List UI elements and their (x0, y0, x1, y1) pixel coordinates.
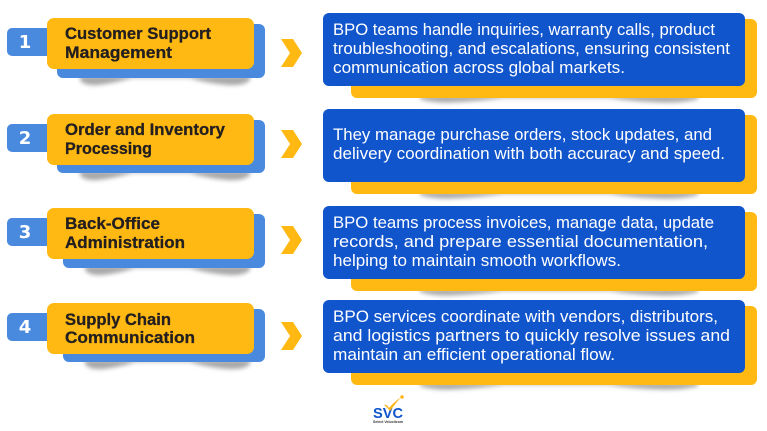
description 1 (323, 13, 745, 86)
shadow: right card 1 (420, 96, 698, 103)
shadow: left card 2 (80, 171, 250, 180)
shadow: left card 3 (85, 266, 250, 275)
heading 4 (47, 303, 254, 354)
number tab 1: 1 (19, 32, 31, 53)
shadow: right card 2 (420, 192, 698, 199)
back plate right 2 (351, 115, 757, 194)
description 2: delivery coordination with both accuracy and speed. (333, 145, 725, 163)
logo (373, 395, 404, 424)
description 3: records, and prepare essential documentation, (333, 233, 708, 251)
number tab 4: 4 (19, 317, 31, 338)
back plate right 4 (351, 306, 757, 385)
shadow: left card 1 (80, 76, 250, 85)
shadow: right card 3 (420, 289, 698, 296)
heading 3: Back-Office (65, 214, 160, 233)
arrow 2 (281, 130, 302, 158)
description 4: and logistics partners to quickly resolve issues and (333, 327, 730, 345)
number tab 4 (7, 313, 57, 341)
heading 1: Customer Support (65, 24, 211, 43)
number tab 3 (7, 218, 57, 246)
heading 3 (47, 208, 254, 259)
shadow: right card 4 (420, 383, 698, 390)
heading 1: Management (65, 43, 172, 62)
back plate 1 (57, 24, 265, 78)
arrow 1 (281, 39, 302, 67)
row 3 (7, 206, 757, 296)
number tab 2: 2 (19, 128, 31, 149)
arrow 3 (281, 226, 302, 254)
arrow 4 (281, 322, 302, 350)
description 2: They manage purchase orders, stock updates, and (333, 126, 712, 144)
description 4 (323, 300, 745, 373)
heading 3: Administration (65, 233, 185, 252)
heading 2: Processing (65, 139, 152, 158)
heading 4: Supply Chain (65, 310, 171, 329)
logo: Select Velocitcom (373, 420, 403, 424)
back plate right 1 (351, 19, 757, 98)
shadow: left card 4 (85, 360, 250, 369)
description 3: BPO teams process invoices, manage data, update (333, 214, 714, 232)
back plate 4 (63, 309, 265, 362)
row 4 (7, 300, 757, 390)
number tab 3: 3 (19, 222, 31, 243)
description 1: BPO teams handle inquiries, warranty calls, product (333, 21, 715, 39)
row 2 (7, 109, 757, 199)
logo: SVC (373, 405, 403, 422)
heading 4: Communication (65, 328, 195, 347)
description 4: BPO services coordinate with vendors, distributors, (333, 308, 718, 326)
number tab 2 (7, 124, 57, 152)
row 1 (7, 13, 757, 103)
back plate 2 (57, 120, 265, 173)
heading 2 (47, 114, 254, 165)
description 3: helping to maintain smooth workflows. (333, 252, 621, 270)
back plate 3 (63, 214, 265, 268)
description 1: troubleshooting, and escalations, ensuring consistent (333, 40, 730, 58)
description 3 (323, 206, 745, 279)
description 1: communication across global markets. (333, 59, 625, 77)
description 4: maintain an efficient operational flow. (333, 346, 615, 364)
back plate right 3 (351, 212, 757, 291)
number tab 1 (7, 28, 57, 56)
heading 2: Order and Inventory (65, 120, 226, 139)
description 2 (323, 109, 745, 182)
heading 1 (47, 18, 254, 69)
